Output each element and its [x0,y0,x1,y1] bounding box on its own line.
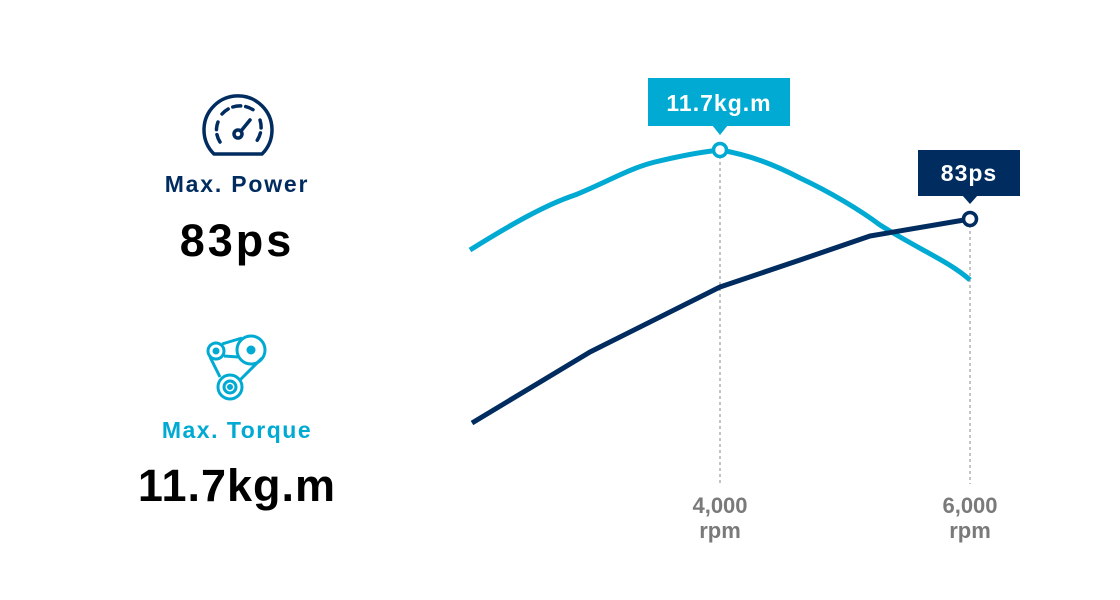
axis label 4000 rpm [692,493,748,543]
callout: 83ps [918,150,1020,204]
axis label 6000 rpm: 6,000 [942,493,998,518]
label: max torque: Max. Torque [162,417,312,443]
value: 83ps: 83ps [180,215,294,266]
axis label 6000 rpm [942,493,998,543]
torque curve [470,150,970,280]
icon: speedometer [202,94,274,156]
icon: belt pulleys [206,334,266,400]
power curve [472,219,970,423]
callout: 11.7kg.m [648,78,790,135]
value: 11.7kg.m: 11.7kg.m [138,460,336,511]
axis label 4000 rpm: rpm [699,518,741,543]
callout: 11.7kg.m: 11.7kg.m [666,90,772,116]
label: max power: Max. Power [165,171,309,197]
axis label 6000 rpm: rpm [949,518,991,543]
axis label 4000 rpm: 4,000 [692,493,748,518]
callout: 83ps: 83ps [941,160,997,186]
